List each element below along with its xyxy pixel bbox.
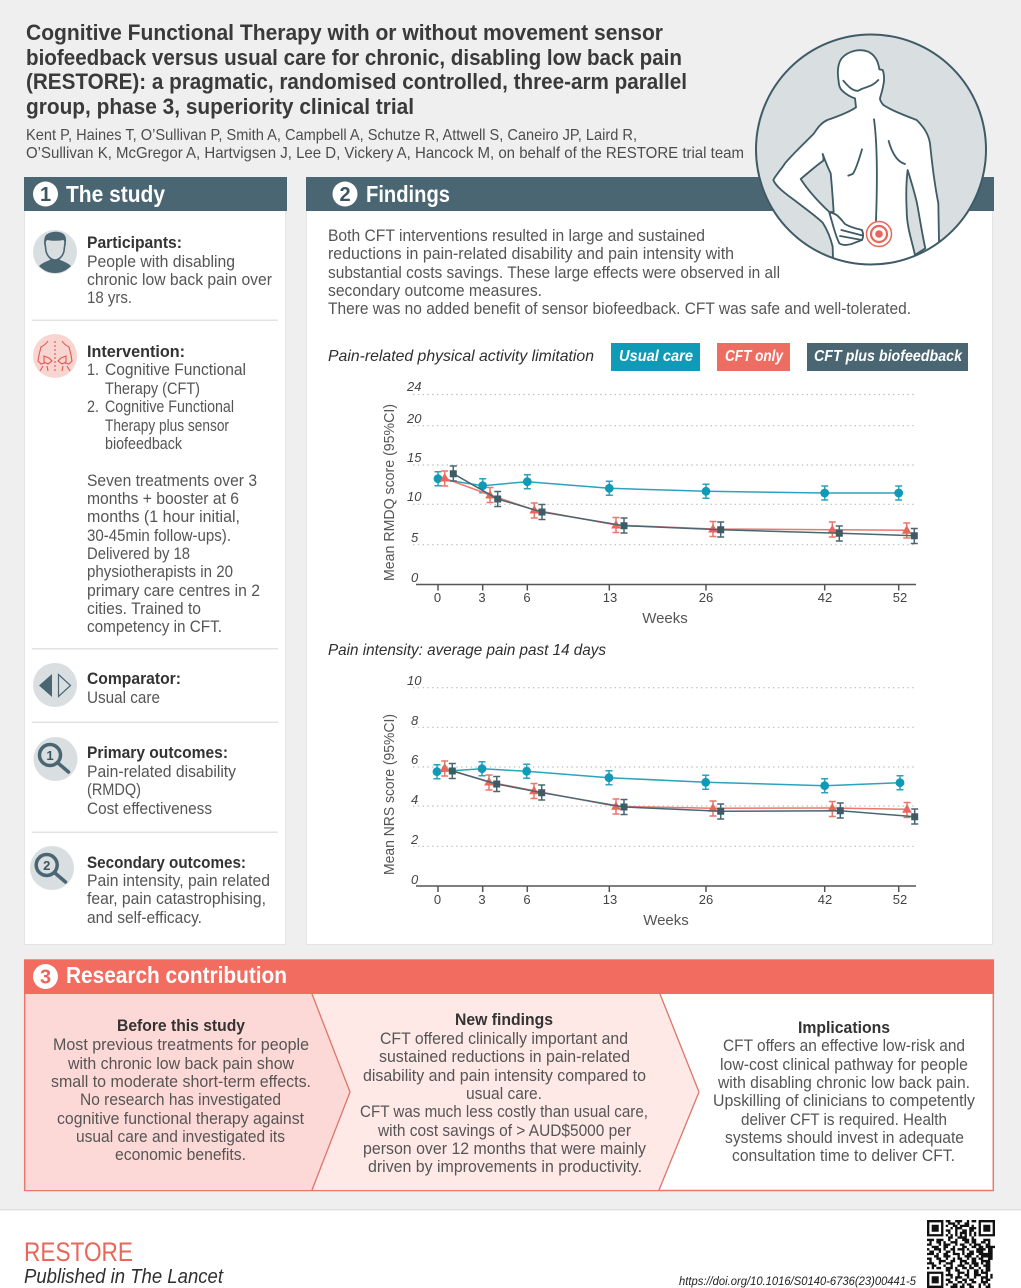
body silhouette (773, 50, 939, 270)
text: findings summary: substantial costs savings. These large effects were observed in all (328, 264, 780, 282)
line chart: RMDQ score: 6 (523, 590, 531, 605)
line chart: RMDQ score: 10 (407, 489, 422, 504)
text: new findings: usual care. (466, 1085, 542, 1103)
text: primary outcomes: Pain-related disability (87, 763, 237, 781)
legend: CFT only (725, 348, 784, 365)
line chart: RMDQ score: Mean RMDQ score (95%CI) (381, 404, 398, 581)
text: before this study: Before this study (117, 1017, 246, 1035)
text: before this study: small to moderate short-term effects. (51, 1073, 311, 1091)
text: implications: deliver CFT is required. Health (741, 1111, 947, 1129)
text: before this study: economic benefits. (115, 1146, 246, 1164)
line chart: NRS score: 2 (410, 832, 419, 847)
text: findings summary (328, 227, 911, 318)
text: new findings: New findings (455, 1011, 553, 1029)
line chart: NRS score (381, 673, 918, 929)
text: intervention: months (1 hour initial, (87, 508, 240, 526)
footer: journal: Published in The Lancet (24, 1266, 224, 1288)
icon: secondary outcomes magnifier: 2 (43, 858, 50, 873)
text: findings summary: reductions in pain-related disability and pain intensity with (328, 245, 734, 263)
series: usual care (434, 472, 903, 500)
icon: participant (33, 230, 77, 274)
line chart: RMDQ score: 20 (406, 411, 422, 426)
text: implications (713, 1019, 976, 1165)
series: CFT only (441, 761, 911, 818)
text: secondary outcomes: Pain intensity, pain related (87, 872, 270, 890)
text: intervention: 30-45min follow-ups). (87, 527, 231, 545)
section number 3: 3 (40, 966, 51, 988)
line chart: NRS score: Weeks (643, 912, 689, 929)
line chart: NRS score: 4 (411, 792, 418, 807)
text: participants: 18 yrs. (87, 289, 132, 307)
heading: findings: Findings (366, 181, 450, 207)
text: new findings: disability and pain intensity compared to (363, 1067, 646, 1085)
text: intervention (87, 343, 260, 636)
text: before this study: usual care and investigated its (76, 1128, 285, 1146)
text: before this study: Most previous treatments for people (53, 1036, 309, 1054)
illustration: back pain figure in circle (756, 34, 986, 270)
line chart: NRS score: 42 (818, 892, 832, 907)
chart title: physical activity limitation: Pain-related physical activity limitation (328, 348, 594, 365)
line chart: NRS score: 10 (407, 673, 422, 688)
text: findings summary: Both CFT interventions resulted in large and sustained (328, 227, 705, 245)
section number 2 (332, 182, 358, 206)
text: intervention: biofeedback (105, 435, 183, 453)
line chart: RMDQ score: 26 (699, 590, 713, 605)
text: intervention: 1. (87, 361, 99, 379)
arm gap (801, 154, 834, 212)
text: comparator: Comparator: (87, 670, 181, 688)
series: CFT only (441, 471, 911, 538)
line chart: NRS score: 0 (411, 872, 419, 887)
text: secondary outcomes: fear, pain catastrophising, (87, 890, 266, 908)
text: intervention: Intervention: (87, 343, 185, 361)
footer: trial name: RESTORE (24, 1237, 133, 1267)
icon: comparator (33, 663, 77, 707)
text: new findings: driven by improvements in productivity. (368, 1158, 642, 1176)
QR code (927, 1220, 995, 1288)
line chart: RMDQ score: Weeks (642, 610, 688, 627)
text: intervention: Cognitive Functional (105, 398, 234, 416)
section number 3 (33, 964, 58, 989)
icon: intervention back with hands (33, 334, 77, 378)
text: secondary outcomes (87, 854, 270, 927)
chart title: pain intensity: Pain intensity: average pain past 14 days (328, 642, 606, 659)
text: intervention: Therapy (CFT) (105, 380, 200, 398)
icon: primary outcomes magnifier: 1 (46, 748, 54, 763)
panel: findings (306, 177, 994, 944)
text: primary outcomes (87, 744, 237, 818)
text: implications: CFT offers an effective low-risk and (723, 1037, 965, 1055)
footer (0, 1209, 1021, 1288)
text: comparator: Usual care (87, 689, 160, 707)
ear and spine details (843, 80, 905, 221)
legend (611, 343, 968, 371)
section number 1 (33, 182, 58, 206)
text: new findings: with cost savings of > AUD$5000 per (377, 1122, 631, 1140)
line chart: RMDQ score: 15 (407, 450, 422, 465)
text: implications: systems should invest in adequate (725, 1129, 964, 1147)
text: intervention: competency in CFT. (87, 618, 222, 636)
line chart: RMDQ score: 0 (434, 590, 441, 605)
text: before this study (51, 1017, 311, 1164)
line chart: NRS score: 6 (523, 892, 531, 907)
text: before this study: with chronic low back pain show (67, 1055, 294, 1073)
authors (26, 127, 744, 162)
text: intervention: Delivered by 18 (87, 545, 190, 563)
section number 2: 2 (339, 184, 351, 206)
legend: CFT plus biofeedback (814, 348, 963, 365)
right arm gap (906, 170, 925, 255)
line chart: RMDQ score: 0 (411, 570, 419, 585)
text: new findings (360, 1011, 648, 1176)
text: implications: Upskilling of clinicians to competently (713, 1092, 976, 1110)
line chart: NRS score: Mean NRS score (95%CI) (381, 714, 398, 875)
legend: Usual care (619, 348, 693, 365)
text: intervention: cities. Trained to (87, 600, 201, 618)
line chart: NRS score: 3 (478, 892, 486, 907)
text: participants: chronic low back pain over (87, 271, 272, 289)
section background: new findings (312, 994, 699, 1190)
icon: secondary outcomes magnifier (30, 846, 74, 890)
line chart: RMDQ score: 42 (818, 590, 832, 605)
line chart: NRS score: 8 (411, 713, 419, 728)
text: comparator (87, 670, 181, 707)
text: implications: low-cost clinical pathway for people (720, 1056, 968, 1074)
authors: O’Sullivan K, McGregor A, Hartvigsen J, Lee D, Vickery A, Hancock M, on behalf of the RESTORE trial team (26, 145, 744, 162)
authors: Kent P, Haines T, O’Sullivan P, Smith A, Campbell A, Schutze R, Attwell S, Caneiro JP, Laird R, (26, 127, 637, 144)
text: intervention: physiotherapists in 20 (87, 563, 233, 581)
line chart: RMDQ score: 52 (893, 590, 907, 605)
text: intervention: months + booster at 6 (87, 490, 239, 508)
title: group, phase 3, superiority clinical trial (26, 94, 414, 119)
text: new findings: CFT was much less costly than usual care, (360, 1103, 648, 1121)
heading: the study: The study (66, 181, 165, 207)
text: intervention: Cognitive Functional (105, 361, 246, 379)
line chart: RMDQ score: 5 (411, 530, 419, 545)
text: intervention: primary care centres in 2 (87, 582, 260, 600)
text: intervention: Seven treatments over 3 (87, 472, 257, 490)
text: primary outcomes: Cost effectiveness (87, 800, 212, 818)
line chart: NRS score: 6 (411, 752, 419, 767)
panel: the study (24, 177, 287, 944)
text: new findings: person over 12 months that were mainly (363, 1140, 647, 1158)
text: implications: Implications (798, 1019, 890, 1037)
text: new findings: CFT offered clinically important and (380, 1030, 628, 1048)
line chart: RMDQ score: 3 (478, 590, 486, 605)
line chart: NRS score: 26 (699, 892, 713, 907)
text: primary outcomes: (RMDQ) (87, 781, 141, 799)
pain target (866, 222, 892, 246)
footer: doi link: https://doi.org/10.1016/S0140-6736(23)00441-5 (679, 1276, 917, 1288)
text: findings summary: secondary outcome measures. (328, 282, 542, 300)
text: findings summary: There was no added benefit of sensor biofeedback. CFT was safe and well-tolerated. (328, 300, 911, 318)
section number 1: 1 (40, 184, 51, 206)
icon: primary outcomes magnifier (34, 737, 78, 781)
line chart: NRS score: 0 (434, 892, 441, 907)
text: implications: with disabling chronic low back pain. (717, 1074, 970, 1092)
line chart: RMDQ score: 24 (406, 379, 421, 394)
text: secondary outcomes: and self-efficacy. (87, 909, 202, 927)
series: usual care (433, 762, 904, 793)
text: secondary outcomes: Secondary outcomes: (87, 854, 246, 872)
title (26, 20, 687, 119)
series: CFT plus biofeedback (450, 466, 918, 544)
text: participants: Participants: (87, 234, 182, 252)
text: implications: consultation time to deliver CFT. (732, 1147, 955, 1165)
title: Cognitive Functional Therapy with or without movement sensor (26, 20, 663, 45)
title: (RESTORE): a pragmatic, randomised controlled, three-arm parallel (26, 69, 687, 94)
text: new findings: sustained reductions in pain-related (379, 1048, 630, 1066)
text: intervention: Therapy plus sensor (105, 417, 229, 435)
text: participants: People with disabling (87, 253, 235, 271)
series: CFT plus biofeedback (449, 764, 918, 824)
hand (829, 213, 863, 245)
text: before this study: No research has investigated (80, 1091, 281, 1109)
text: participants (87, 234, 272, 307)
text: before this study: cognitive functional therapy against (57, 1110, 304, 1128)
title: biofeedback versus usual care for chronic, disabling low back pain (26, 45, 682, 70)
heading: research contribution: Research contribution (66, 962, 287, 988)
section background: before this study (26, 994, 350, 1190)
line chart: NRS score: 13 (603, 892, 617, 907)
text: primary outcomes: Primary outcomes: (87, 744, 228, 762)
text: intervention: 2. (87, 398, 99, 416)
panel: research contribution (24, 960, 994, 1190)
line chart: RMDQ score (381, 379, 918, 627)
line chart: RMDQ score: 13 (603, 590, 617, 605)
line chart: NRS score: 52 (893, 892, 907, 907)
